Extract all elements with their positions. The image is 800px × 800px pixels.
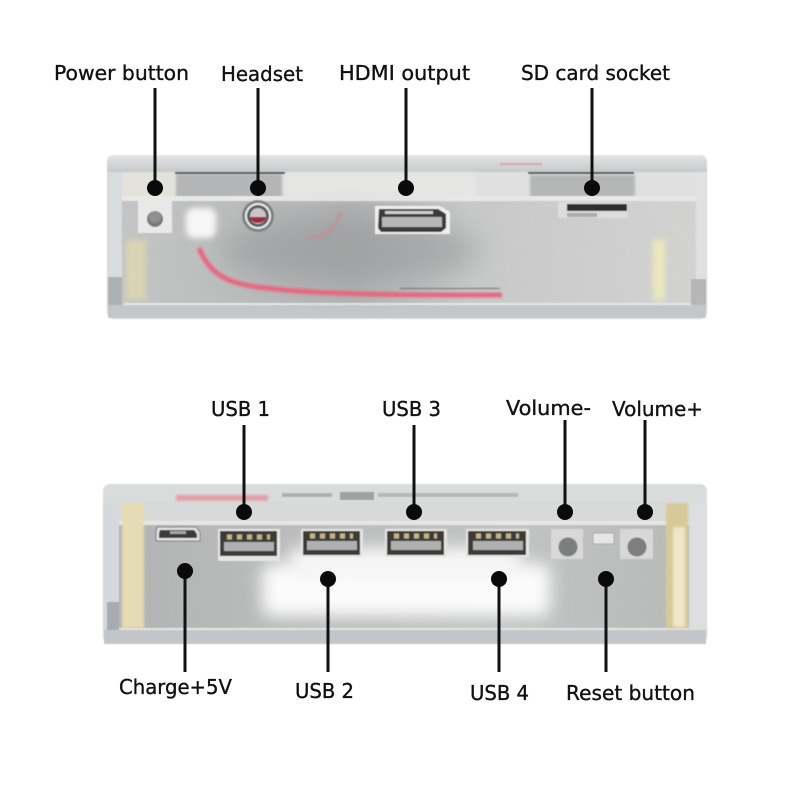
callout: USB 2 xyxy=(295,571,354,703)
callout: Power button: Power button xyxy=(54,61,189,85)
bottom lip xyxy=(108,305,706,318)
callout: Charge+5V xyxy=(119,563,232,699)
icon: volume plus button xyxy=(620,529,653,559)
icon: SD card socket xyxy=(558,202,628,218)
case shell xyxy=(103,484,707,644)
upper lighter band xyxy=(122,172,696,200)
callout: Volume-: Volume- xyxy=(506,396,591,420)
callout: Headset: Headset xyxy=(221,62,303,86)
upper band xyxy=(119,502,689,523)
callout: SD card socket: SD card socket xyxy=(521,61,670,85)
icon: power button xyxy=(138,200,172,233)
panel: bottom case, front side xyxy=(103,484,707,644)
callout: Volume- xyxy=(506,396,591,520)
callout: USB 2: USB 2 xyxy=(295,679,354,703)
callout: USB 3: USB 3 xyxy=(382,397,441,421)
lid edge xyxy=(107,155,707,172)
case shell xyxy=(107,155,707,319)
icon: volume minus button xyxy=(551,529,583,559)
front face xyxy=(122,172,696,305)
white glow xyxy=(186,208,216,238)
panel: top case, rear side xyxy=(107,155,707,319)
left and right walls xyxy=(108,172,122,305)
lid edge xyxy=(103,484,707,503)
callout: Volume+: Volume+ xyxy=(612,397,703,421)
icon: headset jack xyxy=(242,200,274,232)
bottom lip xyxy=(104,630,706,644)
callout: USB 3 xyxy=(382,397,441,520)
left and right walls xyxy=(104,503,119,630)
yellow posts xyxy=(122,503,144,628)
front face xyxy=(119,500,689,630)
icon: USB port 1 xyxy=(218,529,280,561)
dark shadow patch xyxy=(220,215,480,285)
icon: USB port 2 xyxy=(301,529,363,557)
icon: micro USB port xyxy=(156,527,200,541)
red wire xyxy=(199,248,502,295)
icon: USB port 3 xyxy=(385,529,447,557)
callout: SD card socket xyxy=(521,61,670,196)
callout: USB 4 xyxy=(470,571,529,705)
callout: Headset xyxy=(221,62,303,196)
yellow posts xyxy=(126,240,146,300)
callout: Reset button: Reset button xyxy=(566,681,695,705)
callout: HDMI output xyxy=(339,61,470,196)
callout: USB 4: USB 4 xyxy=(470,681,529,705)
icon: HDMI port xyxy=(375,206,450,234)
icon: USB port 4 xyxy=(466,529,529,557)
callout: Power button xyxy=(54,61,189,196)
icon: reset pinhole xyxy=(593,533,614,544)
noise texture xyxy=(122,201,696,303)
callout: USB 1 xyxy=(211,397,270,520)
callout: Volume+ xyxy=(612,397,703,520)
callout: HDMI output: HDMI output xyxy=(339,61,470,85)
white glow xyxy=(262,564,550,616)
noise texture xyxy=(145,526,665,628)
callout: USB 1: USB 1 xyxy=(211,397,270,421)
callout: Reset button xyxy=(566,571,695,705)
callout: Charge+5V: Charge+5V xyxy=(119,675,232,699)
